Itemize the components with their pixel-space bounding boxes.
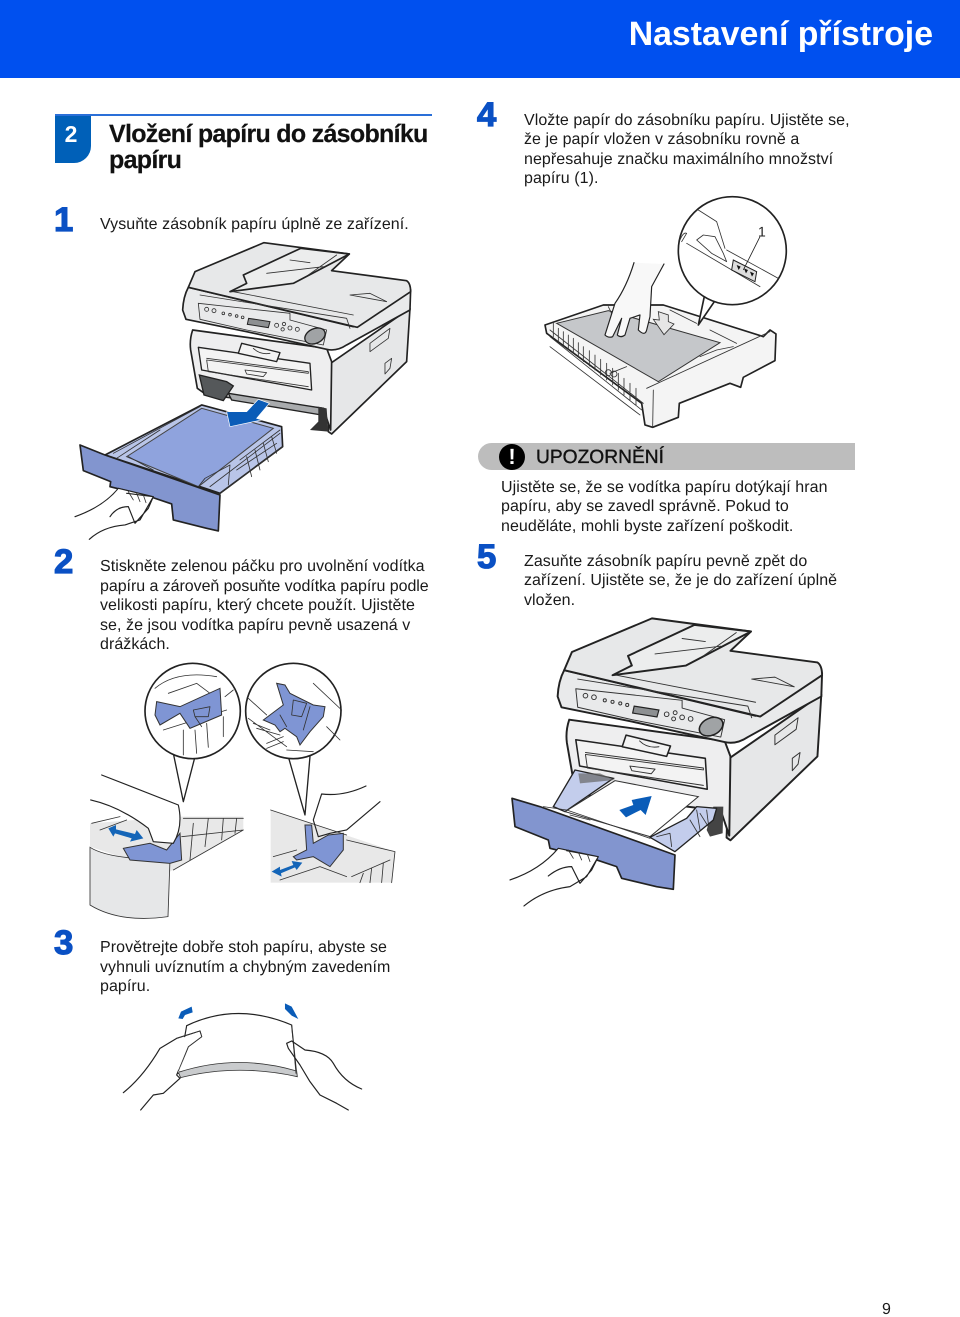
tray front bbox=[512, 798, 675, 889]
arrow bbox=[227, 399, 269, 427]
step 2 text bbox=[100, 558, 429, 653]
step 2 text: velikosti papíru, který chcete použít. Ujistěte bbox=[100, 597, 415, 614]
left hand bbox=[123, 1031, 202, 1110]
warning text: neuděláte, mohli byste zařízení poškodit. bbox=[501, 518, 793, 534]
step 2 text: papíru a zároveň posuňte vodítka papíru podle bbox=[100, 578, 429, 594]
page title: Nastavení přístroje bbox=[629, 15, 933, 53]
left magnifier bbox=[145, 663, 240, 759]
step 3 text bbox=[100, 939, 390, 995]
right magnifier bbox=[246, 663, 341, 759]
section number badge bbox=[55, 116, 91, 163]
section title: papíru bbox=[109, 146, 181, 174]
step 3 text: papíru. bbox=[100, 978, 150, 995]
step number 4: 4 bbox=[477, 96, 496, 134]
paper stack bbox=[178, 1013, 297, 1075]
warning text: Ujistěte se, že se vodítka papíru dotýkají hran bbox=[501, 478, 828, 496]
hand bbox=[510, 848, 598, 906]
tray walls bbox=[105, 405, 283, 493]
hand bbox=[605, 263, 664, 337]
step 4 text bbox=[524, 112, 850, 187]
warning text: papíru, aby se zavedl správně. Pokud to bbox=[501, 498, 789, 515]
warning text bbox=[501, 478, 828, 534]
step 1 text: Vysuňte zásobník papíru úplně ze zařízení. bbox=[100, 216, 409, 233]
illustration: printer with tray pulled out bbox=[75, 243, 411, 539]
section heading bbox=[55, 114, 432, 176]
right arrow bbox=[285, 1003, 298, 1019]
step number 5: 5 bbox=[477, 538, 496, 576]
illustration: fanning paper bbox=[123, 1003, 362, 1110]
icon: exclamation: ! bbox=[508, 444, 516, 469]
step 4 text: Vložte papír do zásobníku papíru. Ujistěte se, bbox=[524, 112, 850, 128]
callout label 1: 1 bbox=[758, 224, 766, 240]
step number 1: 1 bbox=[54, 200, 73, 238]
arrow bbox=[653, 312, 674, 335]
step 3 text: Provětrejte dobře stoh papíru, abyste se bbox=[100, 939, 387, 956]
step 5 text: vložen. bbox=[524, 592, 575, 608]
left magnifier tail bbox=[173, 753, 195, 802]
header band bbox=[0, 0, 960, 78]
section number badge: 2 bbox=[65, 121, 77, 147]
magnifier circle bbox=[678, 197, 786, 305]
step 4 text: papíru (1). bbox=[524, 170, 598, 187]
left scene bbox=[90, 817, 243, 872]
step number 3: 3 bbox=[54, 924, 73, 962]
illustration: tray with paper and magnifier bbox=[545, 197, 786, 427]
step 5 text bbox=[524, 552, 837, 608]
icon: exclamation bbox=[499, 444, 525, 470]
step 5 text: zařízení. Ujistěte se, že je do zařízení úplně bbox=[524, 572, 837, 589]
illustration: guide adjust, left and right bbox=[90, 663, 395, 918]
magnifier tail bbox=[698, 293, 717, 325]
tray front bbox=[80, 445, 220, 531]
step 4 text: že je papír vložen v zásobníku rovně a bbox=[524, 131, 799, 148]
left arrow bbox=[178, 1007, 193, 1019]
arrow bbox=[619, 796, 652, 817]
step 2 text: se, že jsou vodítka papíru pevně usazená v bbox=[100, 616, 410, 634]
warning bar bbox=[478, 443, 855, 470]
warning heading: UPOZORNĚNÍ bbox=[536, 447, 664, 468]
section title: Vložení papíru do zásobníku bbox=[109, 120, 428, 148]
step 5 text: Zasuňte zásobník papíru pevně zpět do bbox=[524, 552, 807, 570]
right magnifier tail bbox=[288, 757, 310, 815]
right hand bbox=[287, 1041, 362, 1110]
step 4 text: nepřesahuje značku maximálního množství bbox=[524, 150, 833, 168]
step 2 text: Stiskněte zelenou páčku pro uvolnění vodítka bbox=[100, 558, 425, 575]
illustration: printer with tray pushed in bbox=[510, 618, 822, 906]
paper in tray bbox=[127, 408, 273, 487]
right scene bbox=[271, 810, 395, 883]
section title bbox=[109, 120, 428, 174]
step 2 text: drážkách. bbox=[100, 636, 170, 653]
step 3 text: vyhnuli uvíznutím a chybným zavedením bbox=[100, 958, 390, 976]
tray walls and paper bbox=[565, 781, 698, 837]
hand bbox=[75, 488, 153, 539]
step number 2: 2 bbox=[54, 543, 73, 581]
